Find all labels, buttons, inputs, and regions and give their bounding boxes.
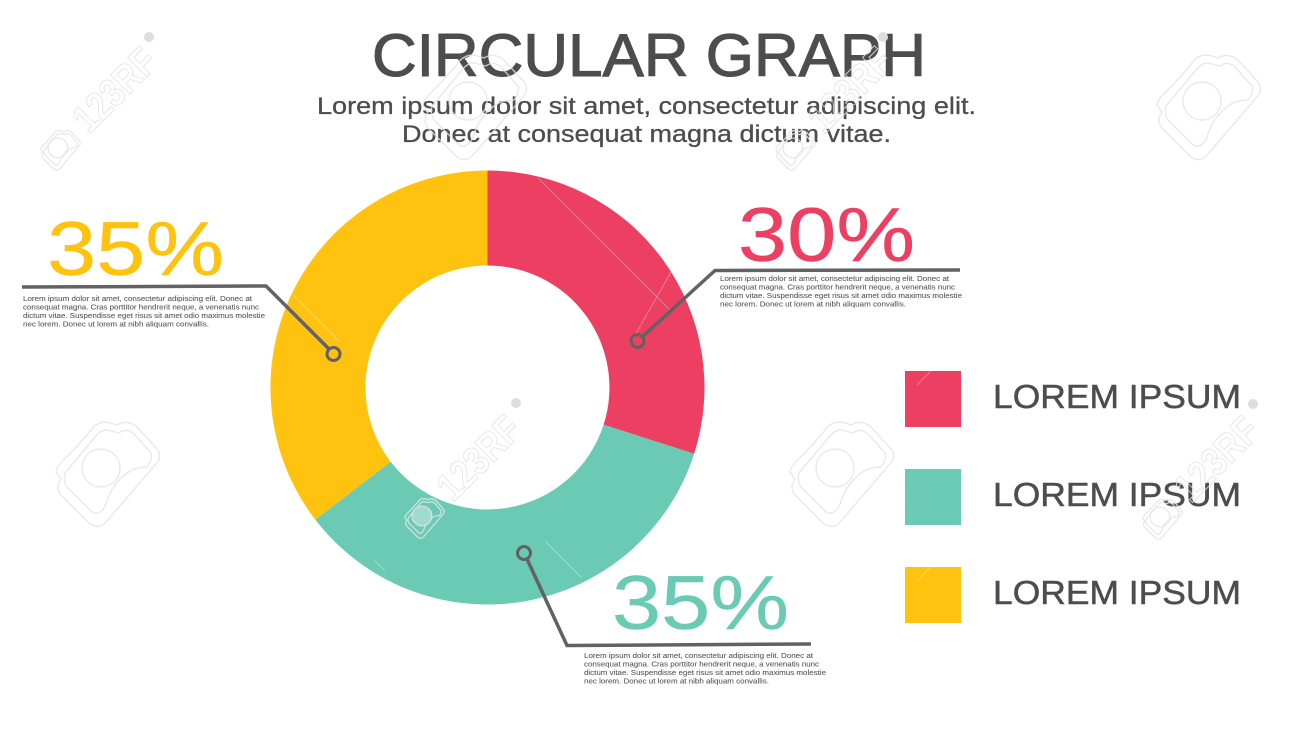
description: red: dictum vitae. Suspendisse eget risus sit amet odio maximus molestie [720, 291, 962, 300]
subtitle: Lorem ipsum dolor sit amet, consectetur adipiscing elit. [317, 93, 976, 120]
description: yellow: consequat magna. Cras porttitor hendrerit neque, a venenatis nunc [23, 302, 259, 312]
watermark: 123RF wordmarks: 123RF [1166, 409, 1268, 510]
leader line: red [631, 270, 960, 348]
legend [905, 371, 1241, 623]
watermark: 123RF wordmarks: 123RF [428, 408, 530, 509]
legend item: yellow: LOREM IPSUM [993, 574, 1241, 611]
description: red: consequat magna. Cras porttitor hendrerit neque, a venenatis nunc [720, 282, 955, 292]
subtitle [317, 93, 976, 148]
legend item: teal [905, 469, 1241, 525]
description: red: Lorem ipsum dolor sit amet, consectetur adipiscing elit. Donec at [720, 274, 950, 283]
description: teal: Lorem ipsum dolor sit amet, consectetur adipiscing elit. Donec at [584, 651, 814, 660]
watermark: 123RF wordmarks: 123RF [64, 40, 166, 141]
legend item: teal: LOREM IPSUM [993, 476, 1241, 513]
legend item: red [905, 371, 1241, 427]
segment: red 30% [488, 170, 704, 454]
description: yellow: Lorem ipsum dolor sit amet, consectetur adipiscing elit. Donec at [23, 294, 253, 303]
description: red: nec lorem. Donec ut lorem at nibh aliquam convallis. [720, 300, 906, 308]
legend item: yellow [905, 567, 1241, 623]
subtitle: Donec at consequat magna dictum vitae. [402, 121, 891, 148]
description: yellow [23, 294, 265, 328]
description: teal: nec lorem. Donec ut lorem at nibh aliquam convallis. [584, 676, 769, 686]
watermark: 123RF wordmarks [64, 32, 1268, 510]
callout: teal 35% [518, 546, 826, 686]
watermark: 123RF wordmarks: 123RF [799, 40, 901, 141]
leader line: teal [518, 546, 811, 646]
description: yellow: dictum vitae. Suspendisse eget risus sit amet odio maximus molestie [23, 311, 265, 320]
description: yellow: nec lorem. Donec ut lorem at nibh aliquam convallis. [23, 320, 209, 328]
donut chart [270, 170, 704, 605]
leader line: yellow [22, 286, 340, 360]
watermark: small egg marks [41, 131, 1182, 539]
legend item: red: LOREM IPSUM [993, 378, 1241, 415]
description: red [720, 274, 962, 308]
value: yellow 35%: 35% [47, 207, 224, 292]
description: teal [584, 651, 826, 686]
description: teal: consequat magna. Cras porttitor hendrerit neque, a venenatis nunc [584, 660, 819, 668]
callout: yellow 35% [22, 207, 340, 360]
segment: teal 35% [315, 425, 694, 605]
callout: red 30% [631, 193, 962, 348]
watermark: large egg marks [56, 55, 1261, 527]
title: CIRCULAR GRAPH [372, 22, 926, 89]
value: teal 35%: 35% [612, 561, 789, 646]
segment: yellow 35% [270, 170, 488, 520]
description: teal: dictum vitae. Suspendisse eget risus sit amet odio maximus molestie [584, 668, 826, 677]
value: red 30%: 30% [738, 193, 915, 278]
